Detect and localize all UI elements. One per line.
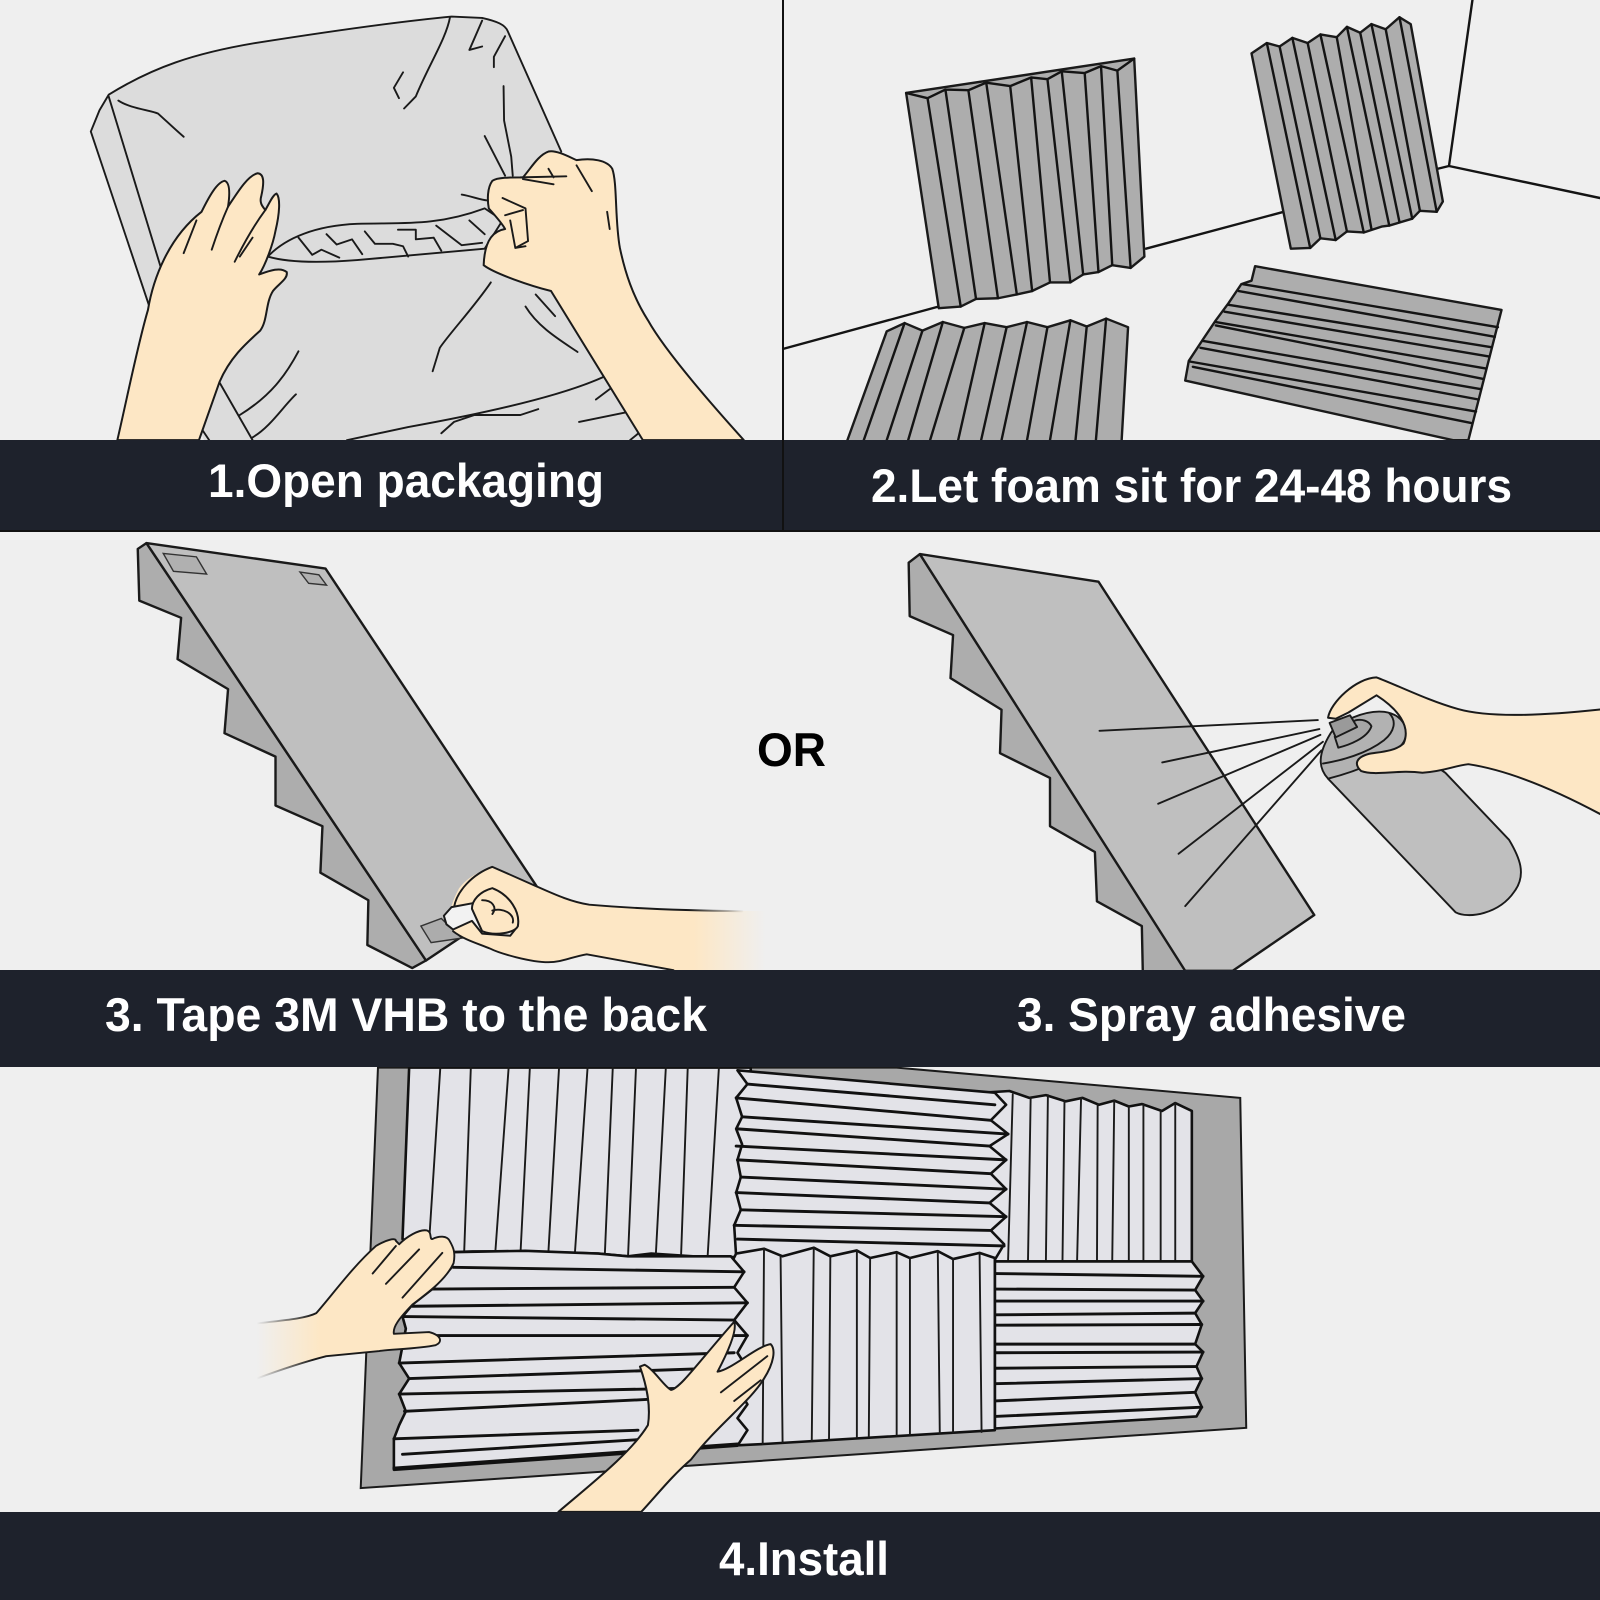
room corner lines bbox=[783, 0, 1600, 349]
caption bar: step 1: 1.Open packaging bbox=[208, 454, 604, 507]
panel: step 3 tape on the back bbox=[138, 543, 781, 970]
caption bar: step 3: 3. Tape 3M VHB to the back bbox=[105, 988, 708, 1041]
icon: hand pressing tape bbox=[444, 867, 781, 970]
caption bar: step 1 bbox=[0, 440, 1600, 532]
caption bar: step 4 bbox=[0, 1512, 1600, 1600]
icon: right fist pulling bag bbox=[484, 151, 744, 440]
foam panel lying front right bbox=[1185, 266, 1502, 440]
icon: hand holding spray can bbox=[1328, 677, 1600, 816]
foam panel lying front left bbox=[846, 319, 1128, 444]
foam tile top left bbox=[403, 1068, 751, 1257]
foam tile bottom right bbox=[995, 1261, 1203, 1429]
bag opening tear bbox=[268, 208, 503, 262]
panel: step 1 open packaging illustration bbox=[91, 17, 744, 440]
icon: spray can bbox=[1321, 712, 1521, 915]
wall backing board bbox=[361, 1068, 1246, 1488]
foam tile bottom middle bbox=[730, 1248, 995, 1446]
divider between top panels bbox=[782, 0, 784, 531]
foam panel with tape squares bbox=[138, 543, 537, 968]
foam panel bbox=[909, 554, 1314, 974]
foam tile top middle bbox=[734, 1070, 1008, 1260]
panel: step 4 wall installation bbox=[257, 1068, 1246, 1512]
panel: step 3 spray adhesive bbox=[909, 554, 1600, 974]
foam panel leaning right bbox=[1252, 17, 1443, 249]
icon: right hand on foam bbox=[558, 1322, 774, 1512]
or separator: OR bbox=[757, 723, 826, 776]
caption bar: step 4: 4.Install bbox=[719, 1532, 889, 1585]
foam tile top right bbox=[983, 1091, 1192, 1261]
caption: step 3 spray: 3. Spray adhesive bbox=[1017, 988, 1406, 1041]
icon: left hand on foam bbox=[257, 1230, 454, 1379]
foam panel leaning left bbox=[906, 59, 1144, 308]
panel: step 2 foam panels resting bbox=[783, 0, 1600, 444]
icon: left hand holding bag bbox=[117, 173, 287, 440]
caption: step 2: 2.Let foam sit for 24-48 hours bbox=[871, 459, 1512, 512]
caption bar: step 3 bbox=[0, 970, 1600, 1067]
spray lines bbox=[1099, 720, 1323, 906]
foam tile bottom left bbox=[394, 1251, 747, 1470]
foam package bag bbox=[91, 17, 653, 440]
